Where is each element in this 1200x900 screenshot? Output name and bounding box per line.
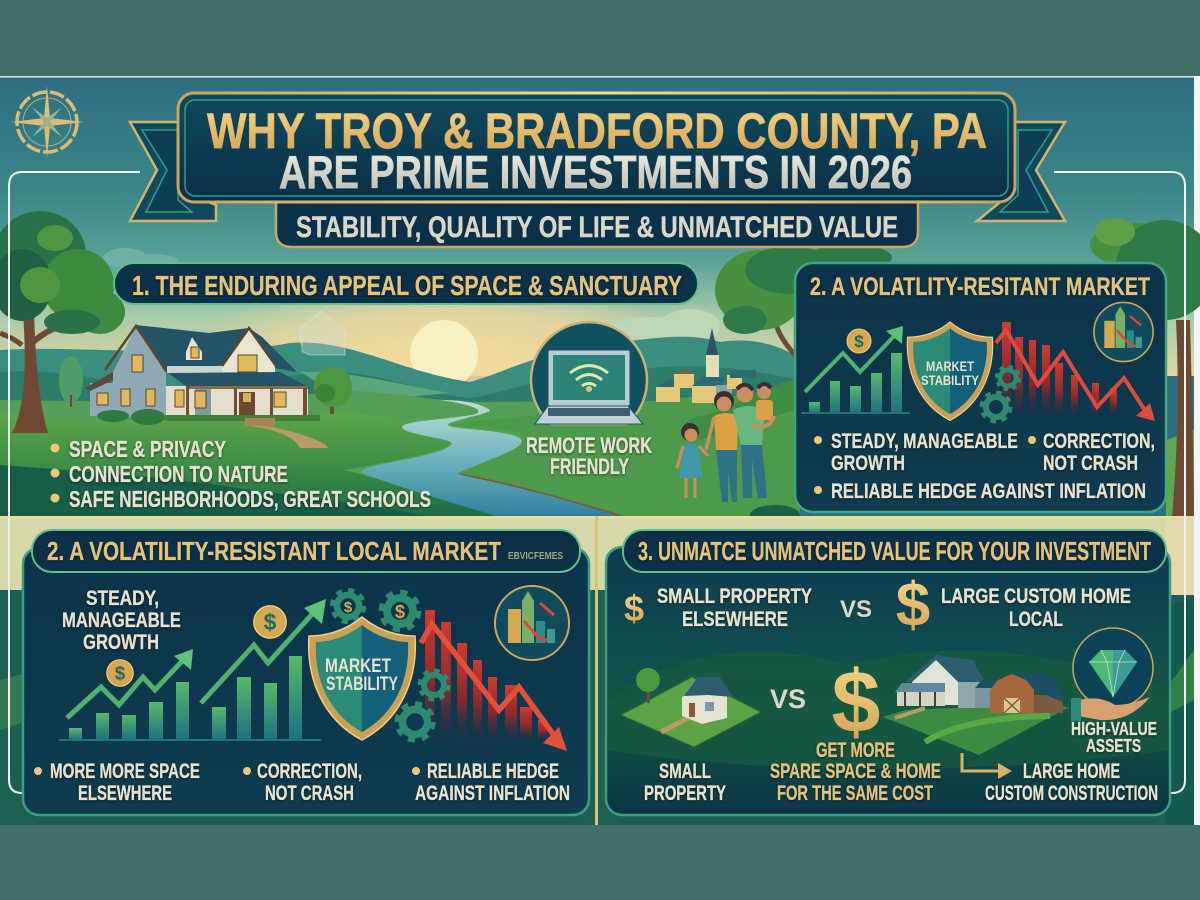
gear icons [982, 367, 1019, 421]
compass rose icon [11, 86, 84, 158]
market stability shield: MARKET [325, 656, 391, 677]
remote work label [526, 433, 652, 479]
family walking [677, 384, 774, 502]
high-value assets label: ASSETS [1086, 736, 1141, 756]
river [360, 400, 620, 517]
market stability shield [309, 617, 415, 740]
gold arrow [962, 753, 1012, 779]
comparison row: LOCAL [1009, 608, 1063, 631]
panel: volatility-resistant market (top right) [795, 263, 1166, 512]
subtitle plate [276, 202, 918, 247]
title banner [130, 93, 1065, 247]
high-value assets label [1071, 719, 1157, 756]
panel bullet list: CORRECTION, [1043, 430, 1155, 453]
sun [410, 320, 478, 388]
small property illustration [621, 668, 761, 747]
section 1 landscape scene [0, 211, 1200, 525]
section 1 bullet list: CONNECTION TO NATURE [69, 461, 288, 487]
white border frame [9, 172, 1185, 793]
title plate [178, 93, 1015, 202]
large dollar sign: $ [832, 652, 880, 751]
laptop remote work icon [531, 322, 647, 424]
large farm property illustration [883, 655, 1069, 755]
left ribbon tail [130, 122, 216, 221]
subtitle plate: STABILITY, QUALITY OF LIFE & UNMATCHED VALUE [296, 211, 898, 244]
large home label [985, 760, 1158, 805]
market stability shield: MARKET [926, 358, 974, 374]
green growth chart [801, 326, 910, 413]
section 1 heading pill [114, 263, 698, 304]
red decline chart [421, 610, 567, 751]
comparison row: SMALL PROPERTY [657, 585, 812, 608]
comparison row: $ [624, 588, 644, 629]
panel bullet lists: ELSEWHERE [78, 782, 172, 805]
small property label: SMALL [659, 760, 711, 783]
left tree [0, 211, 125, 433]
section 1 bullet list: SAFE NEIGHBORHOODS, GREAT SCHOOLS [69, 486, 431, 512]
section 1 bullet list: SPACE & PRIVACY [69, 436, 226, 462]
rolling hills [0, 337, 1194, 520]
panel bullet list [814, 430, 1155, 503]
green growth chart [59, 599, 326, 740]
get more callout: SPARE SPACE & HOME [770, 760, 941, 783]
comparison row: ELSEWHERE [682, 608, 788, 631]
market stability shield: STABILITY [326, 674, 398, 695]
title plate: WHY TROY & BRADFORD COUNTY, PA [207, 103, 987, 159]
white border frame lower [9, 516, 1185, 793]
vs label: VS [770, 684, 806, 714]
farmhouse [85, 325, 320, 426]
steady growth text: GROWTH [83, 631, 159, 654]
market stability shield: STABILITY [921, 372, 980, 388]
steady growth text [62, 587, 181, 654]
right-side scenery: tree [715, 244, 892, 360]
remote work label: REMOTE WORK [526, 433, 652, 458]
panel heading pill: EBVICFEMES [508, 551, 563, 562]
panel bullet lists [34, 760, 570, 805]
market stability shield [907, 322, 993, 420]
panel bullet lists: NOT CRASH [265, 782, 354, 805]
small property label: PROPERTY [644, 782, 726, 805]
panel: unmatched value (bottom right) [606, 530, 1170, 815]
lower background band [0, 516, 1194, 825]
large home label: LARGE HOME [1023, 760, 1120, 783]
far right tree [1090, 218, 1200, 517]
small property label [644, 760, 726, 805]
panel bullet lists: AGAINST INFLATION [415, 782, 570, 805]
title plate: ARE PRIME INVESTMENTS IN 2026 [279, 146, 912, 198]
small cypress tree [59, 356, 83, 407]
panel bullet list: STEADY, MANAGEABLE [831, 430, 1018, 453]
middle tree [314, 367, 352, 414]
panel heading pill: 2. A VOLATILITY-RESISTANT LOCAL MARKET [47, 536, 501, 566]
steady growth text: MANAGEABLE [62, 609, 181, 632]
panel bullet lists: RELIABLE HEDGE [427, 760, 559, 783]
dollar gears: $ [395, 602, 405, 622]
diamond in hand icon [1071, 628, 1153, 721]
panel bullet list: NOT CRASH [1043, 452, 1138, 475]
section 1 bullet list [50, 436, 431, 512]
city badge [1094, 302, 1153, 362]
section 1 heading pill: 1. THE ENDURING APPEAL OF SPACE & SANCTUARY [132, 270, 682, 301]
foreground shrub [750, 505, 800, 525]
comparison row [624, 571, 1131, 640]
steady growth text: STEADY, [86, 587, 159, 610]
get more callout: GET MORE [816, 739, 895, 762]
panel heading pill [32, 530, 580, 572]
dollar gears: $ [344, 599, 353, 616]
right ribbon tail [977, 122, 1065, 221]
panel bullet list: GROWTH [831, 452, 905, 475]
get more callout [770, 739, 941, 805]
get more callout: FOR THE SAME COST [777, 782, 933, 805]
comparison row: LARGE CUSTOM HOME [941, 585, 1131, 608]
high-value assets label: HIGH-VALUE [1071, 719, 1157, 739]
panel heading pill [623, 530, 1166, 572]
comparison row: VS [840, 596, 872, 623]
gear icons [398, 671, 448, 740]
remote work label: FRIENDLY [550, 454, 629, 479]
dollar gears [333, 591, 418, 629]
panel bullet lists: CORRECTION, [257, 760, 362, 783]
watermark house icon [298, 311, 345, 355]
panel: volatility-resistant local market (bottom left) [23, 530, 589, 815]
comparison row: $ [896, 571, 930, 640]
panel bullet lists: MORE MORE SPACE [50, 760, 200, 783]
village with church [656, 328, 795, 440]
red decline chart [996, 322, 1155, 421]
city badge [495, 586, 569, 660]
path to house [250, 424, 328, 448]
valley hills [608, 651, 1168, 769]
